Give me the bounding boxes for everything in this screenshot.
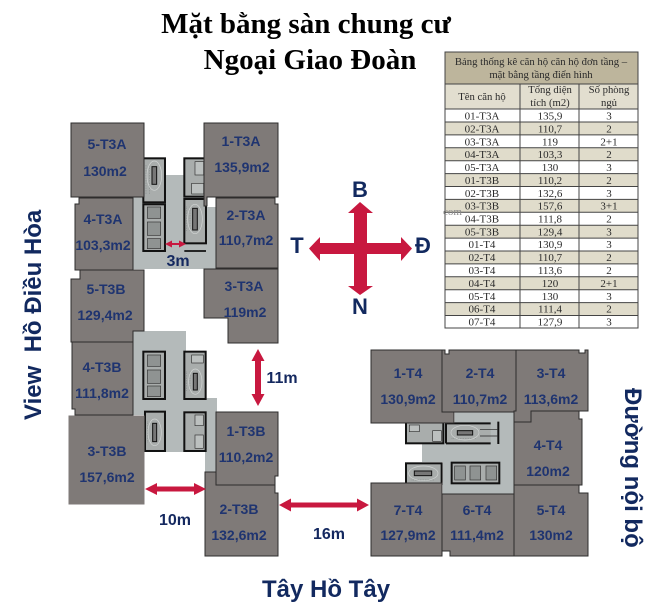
- apartment 2-T4: 2-T4: [466, 365, 495, 381]
- apartment 1-T3B: [216, 412, 278, 485]
- panel: apartment statistics table: 110,7: [538, 252, 563, 264]
- apartment 3-T3A: 119m2: [224, 304, 267, 320]
- apartment 1-T3B: 110,2m2: [219, 449, 273, 465]
- apartment 1-T3A: [204, 123, 278, 206]
- apartment 2-T4: [442, 350, 516, 412]
- panel: apartment statistics table: 03-T3B: [465, 201, 499, 213]
- label: View Hồ Điều Hòa: View Hồ Điều Hòa: [20, 209, 47, 420]
- apartment 3-T4: 3-T4: [537, 365, 566, 381]
- panel: apartment statistics table: 2: [606, 265, 612, 277]
- panel: apartment statistics table: 05-T3A: [465, 162, 499, 174]
- T3B core: [133, 331, 217, 472]
- apartment 5-T4: 5-T4: [537, 502, 566, 518]
- apartment 3-T3B: 157,6m2: [79, 469, 135, 485]
- apartment 5-T4: 130m2: [529, 527, 573, 543]
- panel: apartment statistics table: Tên căn hộ: [458, 91, 506, 103]
- label: Tây Hồ Tây: Tây Hồ Tây: [262, 576, 391, 603]
- panel: apartment statistics table: 2+1: [600, 278, 618, 290]
- panel: apartment statistics table: 2: [606, 149, 612, 161]
- arrow: 11m gap: [252, 349, 298, 406]
- apartment 3-T3B: [69, 416, 144, 504]
- apartment 5-T3B: [71, 270, 144, 342]
- panel: apartment statistics table: 135,9: [538, 110, 563, 122]
- apartment 1-T3A: 1-T3A: [222, 133, 260, 149]
- panel: apartment statistics table: 3: [606, 291, 612, 303]
- panel: tower T3B floor plan: [69, 270, 278, 556]
- panel: apartment statistics table: 3+1: [600, 201, 618, 213]
- icon: compass: N: [352, 294, 368, 319]
- arrow: 16m gap: [279, 498, 369, 543]
- panel: apartment statistics table: 01-T3A: [465, 110, 499, 122]
- panel: apartment statistics table: 04-T4: [469, 278, 496, 290]
- panel: apartment statistics table: 2: [606, 304, 612, 316]
- panel: apartment statistics table: 120: [542, 278, 559, 290]
- apartment 3-T3A: 3-T3A: [225, 278, 263, 294]
- apartment 5-T3B: 5-T3B: [87, 281, 125, 297]
- apartment 6-T4: [442, 494, 514, 556]
- panel: apartment statistics table: 2+1: [600, 136, 618, 148]
- apartment 4-T3B: 4-T3B: [83, 359, 121, 375]
- apartment 4-T3B: [72, 342, 133, 415]
- panel: apartment statistics table: [443, 52, 638, 328]
- title: Ngoại Giao Đoàn: [204, 44, 416, 76]
- panel: apartment statistics table: 2: [606, 175, 612, 187]
- panel: apartment statistics table: 03-T4: [469, 265, 496, 277]
- panel: apartment statistics table: 02-T3B: [465, 188, 499, 200]
- apartment 5-T4: [514, 485, 588, 556]
- apartment 4-T3B: 111,8m2: [75, 385, 129, 401]
- apartment 2-T3B: 2-T3B: [220, 501, 258, 517]
- apartment 6-T4: 6-T4: [463, 502, 492, 518]
- panel: apartment statistics table: 110,7: [538, 123, 563, 135]
- arrow: 10m gap: [145, 483, 206, 529]
- panel: apartment statistics table: 2: [606, 252, 612, 264]
- apartment 5-T3A: 130m2: [83, 163, 127, 179]
- apartment 4-T3A: 4-T3A: [84, 211, 122, 227]
- apartment 3-T4: [514, 350, 588, 422]
- apartment 4-T3A: 103,3m2: [75, 237, 131, 253]
- panel: tower T3A floor plan: [71, 123, 278, 343]
- apartment 5-T3A: 5-T3A: [88, 136, 126, 152]
- watermark fragment: com: [443, 206, 462, 218]
- panel: apartment statistics table: 05-T3B: [465, 226, 499, 238]
- panel: apartment statistics table: 06-T4: [469, 304, 496, 316]
- arrow: 10m gap: 10m: [159, 512, 191, 529]
- panel: apartment statistics table: 3: [606, 162, 612, 174]
- title: Mặt bằng sàn chung cư: [161, 8, 451, 40]
- apartment 4-T3A: [75, 198, 133, 270]
- panel: tower T4 floor plan: [371, 350, 588, 556]
- panel: apartment statistics table: 07-T4: [469, 316, 496, 328]
- apartment 2-T3A: 2-T3A: [227, 207, 265, 223]
- panel: apartment statistics table: Tổng diện: [528, 84, 572, 96]
- panel: apartment statistics table: 05-T4: [469, 291, 496, 303]
- T4 core: [406, 412, 514, 494]
- icon: compass: Đ: [415, 233, 431, 258]
- panel: apartment statistics table: 157,6: [538, 201, 563, 213]
- icon: compass: [290, 177, 431, 319]
- panel: apartment statistics table: 113,6: [538, 265, 563, 277]
- icon: compass: T: [290, 233, 304, 258]
- panel: apartment statistics table: 130: [542, 291, 559, 303]
- apartment 6-T4: 111,4m2: [450, 527, 504, 543]
- panel: apartment statistics table: 2: [606, 123, 612, 135]
- arrow: 11m gap: 11m: [266, 370, 298, 387]
- panel: apartment statistics table: 119: [542, 136, 559, 148]
- panel: apartment statistics table: 3: [606, 316, 612, 328]
- panel: apartment statistics table: 103,3: [538, 149, 563, 161]
- panel: apartment statistics table: 02-T4: [469, 252, 496, 264]
- apartment 1-T4: 1-T4: [394, 365, 423, 381]
- arrow: 3m corridor: 3m: [166, 253, 190, 270]
- apartment 7-T4: 7-T4: [394, 502, 423, 518]
- apartment 7-T4: 127,9m2: [380, 527, 436, 543]
- apartment 4-T4: [514, 411, 582, 485]
- panel: apartment statistics table: 01-T4: [469, 239, 496, 251]
- apartment 1-T3A: 135,9m2: [214, 159, 270, 175]
- panel: apartment statistics table: 111,8: [538, 214, 562, 226]
- apartment 7-T4: [371, 483, 442, 556]
- panel: apartment statistics table: ngủ: [601, 97, 618, 109]
- panel: apartment statistics table: 129,4: [538, 226, 563, 238]
- arrow: 16m gap: 16m: [313, 526, 345, 543]
- panel: apartment statistics table: 110,2: [538, 175, 562, 187]
- panel: apartment statistics table: 04-T3B: [465, 214, 499, 226]
- apartment 4-T4: 4-T4: [534, 437, 563, 453]
- apartment 2-T3A: 110,7m2: [219, 232, 273, 248]
- panel: apartment statistics table: 2: [606, 214, 612, 226]
- panel: apartment statistics table: Số phòng: [589, 84, 630, 96]
- apartment 2-T4: 110,7m2: [453, 391, 507, 407]
- panel: apartment statistics table: 3: [606, 110, 612, 122]
- apartment 4-T4: 120m2: [526, 463, 570, 479]
- panel: apartment statistics table: 3: [606, 226, 612, 238]
- panel: apartment statistics table: mặt bằng tầng điển hình: [489, 69, 593, 81]
- apartment 3-T3B: 3-T3B: [88, 443, 126, 459]
- label: Đường nội bộ: Đường nội bộ: [619, 388, 646, 548]
- arrow: 3m corridor: [165, 240, 190, 270]
- icon: compass: B: [352, 177, 368, 202]
- apartment 1-T3B: 1-T3B: [227, 423, 265, 439]
- panel: apartment statistics table: 02-T3A: [465, 123, 499, 135]
- apartment 5-T3A: [71, 123, 144, 197]
- apartment 3-T4: 113,6m2: [524, 391, 578, 407]
- panel: apartment statistics table: 3: [606, 188, 612, 200]
- apartment 2-T3B: 132,6m2: [211, 527, 267, 543]
- panel: apartment statistics table: 130,9: [538, 239, 563, 251]
- panel: apartment statistics table: tích (m2): [530, 97, 570, 109]
- panel: apartment statistics table: 111,4: [538, 304, 562, 316]
- panel: apartment statistics table: 130: [542, 162, 559, 174]
- panel: apartment statistics table: 03-T3A: [465, 136, 499, 148]
- panel: apartment statistics table: Bảng thống kê căn hộ căn hộ đơn tầng –: [455, 56, 628, 68]
- title: [161, 8, 451, 76]
- panel: apartment statistics table: 127,9: [538, 316, 563, 328]
- panel: apartment statistics table: 01-T3B: [465, 175, 499, 187]
- panel: apartment statistics table: 3: [606, 239, 612, 251]
- apartment 2-T3A: [216, 198, 278, 268]
- panel: apartment statistics table: 132,6: [538, 188, 563, 200]
- apartment 1-T4: [371, 350, 454, 423]
- panel: apartment statistics table: 04-T3A: [465, 149, 499, 161]
- apartment 1-T4: 130,9m2: [380, 391, 436, 407]
- apartment 2-T3B: [205, 472, 278, 556]
- apartment 5-T3B: 129,4m2: [77, 307, 133, 323]
- apartment 3-T3A: [204, 269, 278, 343]
- T3A core: [133, 158, 216, 269]
